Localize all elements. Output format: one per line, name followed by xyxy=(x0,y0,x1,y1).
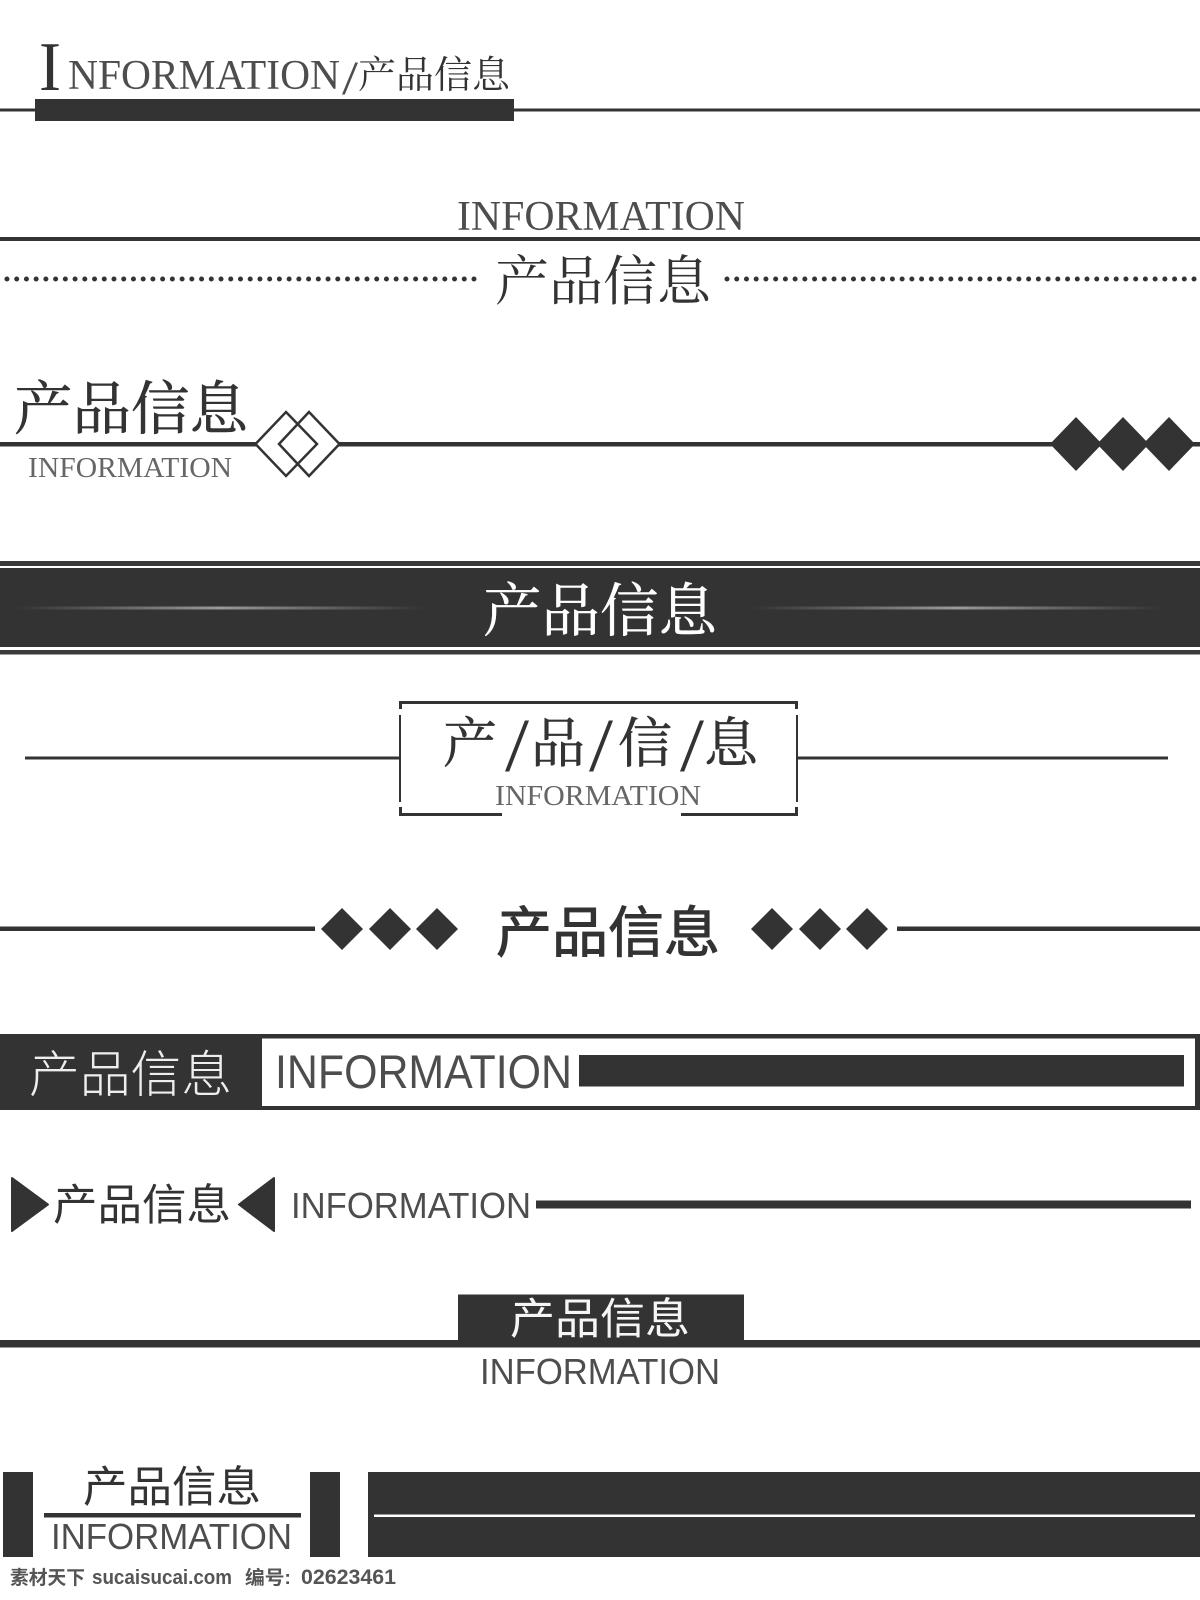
heading: INFORMATION with large initial: I xyxy=(39,29,61,106)
title style 1: large initial with bar: NFORMATION xyxy=(68,53,340,99)
title style 1: large initial with bar: 产品信息 xyxy=(358,55,511,97)
title style 9: tab on a line: 产品信息 xyxy=(510,1296,690,1344)
icon: right-pointing triangle xyxy=(12,1178,48,1231)
title style 9: tab on a line: INFORMATION xyxy=(480,1351,720,1392)
title style 5: framed title with side lines: / xyxy=(589,704,614,788)
watermark: sucaisucai.com xyxy=(92,1567,232,1589)
title style 10: bracket bars and long banner xyxy=(3,1464,1200,1557)
icon: three solid diamonds xyxy=(1050,417,1195,471)
title style 5: framed title with side lines: / xyxy=(680,704,705,788)
title style 7: dark label with outlined bar: 产品信息 xyxy=(29,1047,232,1103)
title style 3: outlined and solid diamonds: INFORMATION xyxy=(28,452,232,484)
title style 3: outlined and solid diamonds: 产品信息 xyxy=(14,377,249,442)
title style 10: bracket bars and long banner: 产品信息 xyxy=(83,1464,261,1512)
title style 6: diamonds either side of bold title xyxy=(0,902,1200,964)
title style 6: diamonds either side of bold title: 产品信息 xyxy=(496,902,720,964)
title style 3: outlined and solid diamonds xyxy=(0,377,1200,484)
watermark: 编号: xyxy=(245,1566,291,1589)
title style 5: framed title with side lines: 产 xyxy=(443,714,497,774)
icon: outlined double diamond xyxy=(256,412,340,476)
watermark: 02623461 xyxy=(301,1566,396,1589)
title style 4: dark banner with glow lines xyxy=(0,561,1200,654)
title style 1: large initial with bar: / xyxy=(342,52,359,105)
title style 5: framed title with side lines: 品 xyxy=(531,714,585,774)
title style 5: framed title with side lines: / xyxy=(505,704,530,788)
watermark: 素材天下 xyxy=(10,1567,85,1589)
frame xyxy=(399,701,798,816)
title style 1: large initial with bar xyxy=(0,29,1200,121)
watermark xyxy=(10,1566,396,1589)
title style 10: bracket bars and long banner: INFORMATION xyxy=(51,1516,292,1557)
icon: left-pointing triangle xyxy=(239,1178,274,1231)
title style 5: framed title with side lines: 信 xyxy=(618,714,672,774)
title style 8: triangles enclosing title xyxy=(12,1178,1191,1231)
title style 7: dark label with outlined bar: INFORMATION xyxy=(275,1045,572,1098)
heading: serif Chinese: 产品信息 xyxy=(495,252,712,312)
title style 2: centered with solid and dotted lines xyxy=(0,194,1200,312)
title style 5: framed title with side lines xyxy=(25,701,1168,816)
title style 8: triangles enclosing title: INFORMATION xyxy=(291,1185,531,1226)
title style 8: triangles enclosing title: 产品信息 xyxy=(53,1182,231,1230)
title style 9: tab on a line xyxy=(0,1294,1200,1392)
title style 5: framed title with side lines: INFORMATION xyxy=(495,780,701,812)
title style 4: dark banner with glow lines: 产品信息 xyxy=(483,579,718,644)
title style 7: dark label with outlined bar xyxy=(0,1034,1200,1110)
title style 5: framed title with side lines: 息 xyxy=(704,714,759,774)
title style 2: centered with solid and dotted lines: INFORMATION xyxy=(457,194,745,240)
